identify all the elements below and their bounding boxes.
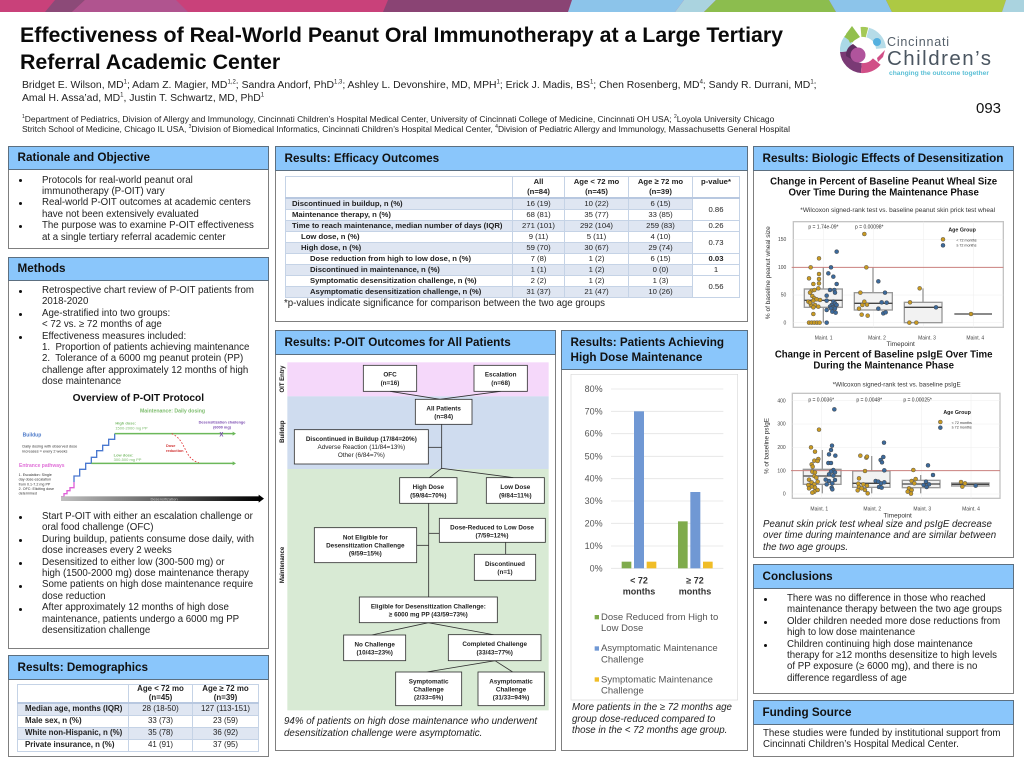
efficacy outcomes table: 7 (8) (531, 254, 546, 263)
demographics table: Male sex, n (%) (25, 716, 82, 725)
efficacy outcomes table: 10 (26) (648, 287, 673, 296)
rationale bullets: have not been extensively evaluated (42, 209, 199, 220)
bar chart: high dose maintenance: 70% (585, 406, 603, 416)
panel: demographics (8, 655, 269, 757)
demographics table: (n=45) (149, 693, 172, 702)
panel: high dose maintenance (561, 330, 748, 751)
chart: wheal size box plot: Over Time During the Maintenance Phase (789, 188, 979, 199)
rationale bullets: immunotherapy (P-OIT) vary (42, 186, 165, 197)
chart: wheal size box plot: % of baseline peanut wheal size (765, 226, 772, 319)
protocol bullets: During buildup, patients consume dose daily, with (42, 534, 254, 545)
chart: wheal size box plot: *Wilcoxon signed-rank test vs. baseline peanut skin prick test wheal (800, 207, 996, 214)
methods bullets (42, 285, 254, 387)
high dose caption (572, 702, 732, 736)
efficacy outcomes table: 259 (83) (646, 221, 675, 230)
chart: psIgE box plot: 0 (783, 492, 786, 498)
chart: overview of P-OIT protocol: Maintenance: Daily dosing (140, 408, 205, 414)
chart: overview of P-OIT protocol: Desensitization (150, 496, 178, 501)
heading: conclusions: Conclusions (762, 570, 833, 582)
efficacy outcomes table: 1 (2) (589, 276, 604, 285)
logo: Cincinnati Children's: changing the outcome together (889, 70, 989, 77)
flowchart: patient outcomes: Challenge (414, 686, 444, 693)
demographics table: 28 (18-50) (142, 704, 179, 713)
chart: psIgE box plot: 100 (777, 468, 786, 474)
chart: wheal size box plot: Change in Percent of Baseline psIgE Over Time (775, 349, 993, 360)
demographics table: Private insurance, n (%) (25, 740, 114, 749)
methods bullets: 1. Proportion of patients achieving maintenance (42, 342, 249, 353)
chart: wheal size box plot: During the Maintenance Phase (813, 361, 955, 372)
chart: wheal size box plot: 0 (784, 320, 787, 326)
demographics table: 36 (92) (213, 728, 238, 737)
heading: rationale and objective (8, 146, 268, 170)
efficacy outcomes table: Discontinued in buildup, n (%) (292, 199, 403, 208)
flowchart: patient outcomes: (31/33=94%) (493, 695, 529, 702)
efficacy outcomes table (285, 176, 740, 298)
chart: wheal size box plot: < 72 months (956, 239, 977, 243)
heading: methods: Methods (18, 262, 66, 274)
chart: wheal size box plot: Change in Percent of Baseline Peanut Wheal Size (770, 176, 998, 187)
flowchart: patient outcomes: OIT Entry (280, 365, 286, 393)
chart: wheal size box plot: ≥ 72 months (956, 243, 977, 247)
outcomes caption: 94% of patients on high dose maintenance who underwent (284, 716, 537, 727)
chart: psIgE box plot: 200 (777, 445, 786, 451)
efficacy outcomes table: 2 (2) (531, 276, 546, 285)
chart: wheal size box plot: Timepoint (887, 341, 915, 348)
efficacy outcomes table: 0 (0) (653, 265, 668, 274)
biologic caption (763, 519, 996, 553)
bar chart: high dose maintenance: 60% (585, 429, 603, 439)
bar chart: high dose maintenance: 0% (590, 563, 603, 573)
chart: overview of P-OIT protocol: day dose escalation (19, 478, 51, 482)
chart: overview of P-OIT protocol: Overview of P-OIT Protocol (73, 393, 204, 404)
efficacy outcomes table: 292 (104) (580, 221, 613, 230)
rationale bullets (42, 174, 254, 243)
chart: psIgE box plot: Age Group (943, 410, 972, 416)
demographics table: 127 (113-151) (201, 704, 250, 713)
flowchart: patient outcomes: Dose-Reduced to Low Dose (450, 524, 534, 531)
chart: overview of P-OIT protocol: Dose (166, 444, 175, 448)
chart: overview of P-OIT protocol: High dose: (115, 420, 136, 425)
flowchart: patient outcomes: Adverse Reaction (11/84=13%) (318, 444, 405, 451)
protocol bullets: desensitization challenge (42, 625, 150, 636)
bar chart: high dose maintenance: Dose Reduced from High to (601, 612, 718, 623)
efficacy outcomes table: 10 (22) (584, 199, 609, 208)
flowchart: patient outcomes: (9/84=11%) (499, 492, 532, 499)
flowchart: patient outcomes: Symptomatic (409, 678, 449, 685)
chart: overview of P-OIT protocol: 1. Escalation: Single (19, 473, 52, 477)
chart: wheal size box plot: 100 (778, 265, 787, 271)
biologic caption: Peanut skin prick test wheal size and psIgE decrease (763, 519, 992, 530)
panel: P-OIT outcomes (275, 330, 556, 751)
methods bullets: Age-stratified into two groups: (42, 308, 170, 319)
efficacy outcomes table: 6 (15) (650, 199, 671, 208)
efficacy outcomes table: 1 (2) (589, 254, 604, 263)
efficacy outcomes table: 68 (81) (526, 210, 551, 219)
panel: biologic effects (753, 146, 1014, 558)
efficacy outcomes table: 30 (67) (584, 243, 609, 252)
chart: overview of P-OIT protocol: 1500-2000 mg PP (115, 425, 148, 430)
chart: psIgE box plot: Maint. 2 (863, 506, 881, 512)
heading: biologic effects: Results: Biologic Effects of Desensitization (762, 152, 1003, 164)
bar chart: high dose maintenance: months (679, 586, 711, 596)
chart: wheal size box plot: Maint. 1 (815, 336, 833, 342)
flowchart: patient outcomes: Other (6/84=7%) (338, 452, 385, 459)
methods bullets: dose maintenance (42, 376, 121, 387)
heading: P-OIT outcomes: Results: P-OIT Outcomes for All Patients (284, 336, 511, 348)
bar chart: high dose maintenance: Challenge (601, 685, 644, 696)
efficacy outcomes table: 59 (70) (526, 243, 551, 252)
bar chart: high dose maintenance: months (623, 586, 655, 596)
heading: conclusions (752, 564, 1014, 588)
bar chart: high dose maintenance: Challenge (601, 654, 644, 665)
heading: biologic effects (752, 146, 1014, 170)
conclusions bullets: high to low dose maintenance (787, 627, 915, 638)
rationale bullets: Real-world P-OIT outcomes at academic centers (42, 197, 251, 208)
bar chart: high dose maintenance: ≥ 72 (686, 575, 704, 585)
demographics table: 33 (73) (148, 716, 173, 725)
methods bullets: 2018-2020 (42, 296, 88, 307)
conclusions bullets: maintenance therapy between the two age groups (787, 604, 1002, 615)
funding text (763, 728, 1000, 750)
chart: psIgE box plot: *Wilcoxon signed-rank test vs. baseline psIgE (833, 382, 961, 389)
efficacy outcomes table: 6 (15) (650, 254, 671, 263)
efficacy outcomes table: 21 (47) (584, 287, 609, 296)
demographics table: Median age, months (IQR) (25, 704, 122, 713)
efficacy outcomes table: Maintenance therapy, n (%) (292, 210, 391, 219)
chart: psIgE box plot: Maint. 4 (962, 506, 980, 512)
flowchart: patient outcomes: (n=68) (491, 380, 510, 387)
bar chart: high dose maintenance: Asymptomatic Maintenance (601, 643, 718, 654)
flowchart: patient outcomes: (2/33=6%) (414, 695, 443, 702)
efficacy outcomes table: Symptomatic desensitization challenge, n (%) (310, 276, 477, 285)
efficacy outcomes table: 29 (74) (648, 243, 673, 252)
demographics table (17, 684, 259, 752)
chart: overview of P-OIT protocol: X (219, 432, 223, 438)
high dose caption: More patients in the ≥ 72 months age (572, 702, 732, 713)
chart: psIgE box plot: Timepoint (884, 512, 912, 519)
chart: overview of P-OIT protocol: Daily dosing with observed dose (22, 444, 77, 448)
efficacy outcomes table: Time to reach maintenance, median number of days (IQR) (292, 221, 502, 230)
bar chart: high dose maintenance: 50% (585, 451, 603, 461)
protocol bullets: Desensitized to either low (300-500 mg) or (42, 557, 225, 568)
flowchart: patient outcomes: (10/43=23%) (356, 649, 393, 656)
chart: psIgE box plot: % of baseline psIgE (764, 418, 771, 474)
heading: efficacy outcomes (274, 146, 748, 170)
efficacy outcomes table: 0.86 (709, 204, 723, 214)
flowchart: patient outcomes: Discontinued in Buildup (17/84=20%) (306, 436, 417, 443)
affiliations: Stritch School of Medicine, Chicago IL USA, 3Division of Biomedical Informatics, Cincinnati Children’s Hospital Medical Center, 4Division of Pediatric Allergy and Immunology, Massachusetts General Hospital (22, 124, 790, 134)
conclusions bullets (787, 593, 1002, 684)
flowchart: patient outcomes: Escalation (485, 372, 517, 379)
heading: rationale and objective: Rationale and Objective (18, 150, 150, 164)
heading: funding source (752, 700, 1014, 724)
title: Effectiveness of Real-World Peanut Oral Immunotherapy at a Large Tertiary (20, 23, 783, 47)
efficacy outcomes table: Low dose, n (%) (301, 232, 360, 241)
protocol bullets: maintenance, patients undergo a 6000 mg PP (42, 614, 239, 625)
demographics table: 35 (78) (148, 728, 173, 737)
methods bullets: Retrospective chart review of P-OIT patients from (42, 285, 254, 296)
conclusions bullets: therapy for ≥12 months desensitize to high levels (787, 650, 997, 661)
efficacy outcomes table: 1 (714, 265, 718, 274)
chart: psIgE box plot: p = 0.00025* (903, 397, 932, 403)
heading: demographics: Results: Demographics (18, 660, 148, 674)
heading: efficacy outcomes: Results: Efficacy Outcomes (284, 152, 439, 164)
chart: wheal size box plot: 150 (778, 237, 787, 243)
flowchart: patient outcomes: (n=16) (381, 380, 399, 387)
poster number: 093 (976, 100, 1001, 117)
efficacy outcomes table: Asymptomatic desensitization challenge, n (%) (310, 287, 481, 296)
title: Referral Academic Center (20, 50, 280, 74)
high dose caption: those in the < 72 months age group. (572, 725, 727, 736)
protocol bullets (42, 511, 254, 636)
chart: psIgE box plot: 400 (777, 398, 786, 404)
flowchart: patient outcomes: Challenge (496, 687, 527, 694)
efficacy outcomes table: High dose, n (%) (301, 243, 361, 252)
conclusions bullets: Children continuing high dose maintenance (787, 639, 973, 650)
logo: Cincinnati Children's (840, 26, 991, 77)
efficacy outcomes table: 1 (1) (531, 265, 546, 274)
outcomes caption: desensitization challenge were asymptomatic. (284, 728, 482, 739)
efficacy outcomes table: (n=45) (585, 187, 608, 196)
bar chart: high dose maintenance (570, 374, 738, 700)
heading: P-OIT outcomes (274, 330, 556, 354)
flowchart: patient outcomes: Asymptomatic (489, 679, 533, 686)
affiliations: 1Department of Pediatrics, Division of Allergy and Immunology, Cincinnati Children’s Hospital Medical Center, University of Cincinnati College of Medicine, Cincinnati OH USA; 2Loyola University Chicago (22, 114, 774, 124)
flowchart: patient outcomes: All Patients (426, 406, 461, 413)
chart: overview of P-OIT protocol: 2. OFC: Eliciting dose (19, 487, 54, 491)
flowchart: patient outcomes: No Challenge (354, 641, 395, 648)
flowchart: patient outcomes: (n=84) (434, 414, 453, 421)
flowchart: patient outcomes: ≥ 6000 mg PP (43/59=73%) (389, 612, 468, 619)
chart: overview of P-OIT protocol: 300-500 mg PP (114, 457, 142, 462)
chart: psIgE box plot: p = 0.0036* (808, 397, 834, 403)
conclusions bullets: There was no difference in those who reached (787, 593, 986, 604)
logo: Cincinnati Children's: Cincinnati (887, 35, 949, 49)
conclusions bullets: of PP exposure (≥ 6000 mg), and there is no (787, 661, 977, 672)
chart: overview of P-OIT protocol: determined (19, 492, 37, 496)
demographics table: 23 (59) (213, 716, 238, 725)
panel: funding source (753, 700, 1014, 757)
demographics table: (n=39) (214, 693, 237, 702)
bar chart: high dose maintenance: 20% (585, 518, 603, 528)
chart: overview of P-OIT protocol: Low dose: (114, 452, 133, 457)
flowchart: patient outcomes: (9/59=15%) (349, 551, 382, 558)
chart: overview of P-OIT protocol: from 0.1-7.2 mg PP (19, 482, 51, 486)
flowchart: patient outcomes: Maintenance (280, 546, 286, 583)
logo: Cincinnati Children's: Children’s (887, 47, 991, 70)
efficacy outcomes table: 0.03 (709, 254, 723, 263)
bar chart: high dose maintenance: 30% (585, 496, 603, 506)
demographics table: 41 (91) (148, 740, 173, 749)
flowchart: patient outcomes: Not Eligible for (343, 534, 388, 541)
heading: funding source: Funding Source (762, 706, 851, 718)
flowchart: patient outcomes: Completed Challenge (462, 641, 527, 648)
bar chart: high dose maintenance: Low Dose (601, 623, 643, 634)
heading: high dose maintenance: High Dose Maintenance (570, 351, 702, 364)
chart: psIgE box plot: Maint. 3 (913, 506, 931, 512)
bar chart: high dose maintenance: Symptomatic Maintenance (601, 674, 713, 685)
conclusions bullets: difference regardless of age (787, 673, 907, 684)
efficacy outcomes table: All (534, 177, 543, 186)
panel: conclusions (753, 564, 1014, 694)
bar chart: high dose maintenance: < 72 (630, 575, 648, 585)
chart: overview of P-OIT protocol: reduction (166, 449, 184, 453)
flowchart: patient outcomes: Desensitization Challenge (326, 542, 405, 549)
efficacy outcomes table: Age < 72 mo (574, 177, 619, 186)
flowchart: patient outcomes: OFC (383, 372, 397, 379)
chart: psIgE box plot (764, 382, 1001, 519)
chart: wheal size box plot: Maint. 2 (868, 336, 886, 342)
bar chart: high dose maintenance: 80% (585, 384, 603, 394)
panel: methods (8, 257, 269, 649)
chart: psIgE box plot: 300 (777, 422, 786, 428)
chart: overview of P-OIT protocol: increases ≈ every 2 weeks (22, 449, 67, 453)
funding text: These studies were funded by institutional support from (763, 728, 1000, 738)
flowchart: patient outcomes: Low Dose (500, 484, 531, 491)
rationale bullets: The purpose was to examine P-OIT effectiveness (42, 220, 254, 231)
flowchart: patient outcomes: High Dose (413, 484, 444, 491)
chart: psIgE box plot: < 72 months (952, 421, 972, 425)
chart: wheal size box plot: 50 (781, 293, 787, 299)
heading: high dose maintenance: Results: Patients Achieving (570, 336, 724, 348)
affiliations (22, 114, 790, 134)
heading: high dose maintenance (560, 330, 748, 370)
efficacy outcomes table: 1 (2) (589, 265, 604, 274)
protocol bullets: high (1500-2000 mg) dose maintenance therapy (42, 568, 249, 579)
high dose caption: group dose-reduced compared to (572, 714, 715, 725)
flowchart: patient outcomes: (33/43=77%) (476, 649, 513, 656)
title (20, 23, 783, 74)
chart: wheal size box plot (765, 176, 1004, 372)
efficacy outcomes table: Age ≥ 72 mo (638, 177, 683, 186)
chart: overview of P-OIT protocol: Desensitization challenge (199, 421, 245, 425)
chart: overview of P-OIT protocol: Buildup (23, 433, 41, 439)
chart: wheal size box plot: p = 0.00098* (855, 225, 884, 231)
efficacy outcomes table: 4 (10) (650, 232, 671, 241)
protocol bullets: Start P-OIT with either an escalation challenge or (42, 511, 253, 522)
flowchart: patient outcomes: (7/59=12%) (476, 532, 508, 539)
rationale bullets: at a single tertiary referral academic center (42, 232, 226, 243)
protocol bullets: dose reduction (42, 591, 106, 602)
outcomes caption (284, 716, 538, 739)
flowchart: patient outcomes: (59/84=70%) (410, 492, 447, 499)
flowchart: patient outcomes: Discontinued (485, 561, 525, 568)
heading: demographics (8, 654, 268, 680)
chart: psIgE box plot: ≥ 72 months (952, 426, 972, 430)
efficacy outcomes table: 33 (85) (648, 210, 673, 219)
efficacy outcomes table: 0.73 (709, 238, 723, 246)
demographics table: White non-Hispanic, n (%) (25, 728, 122, 737)
bar chart: high dose maintenance: 40% (585, 474, 603, 484)
methods bullets: Effectiveness measures included: (42, 331, 186, 342)
efficacy outcomes table: 5 (11) (587, 232, 606, 241)
heading: methods (8, 256, 268, 280)
top colour band (0, 0, 1024, 12)
chart: wheal size box plot: Maint. 3 (918, 336, 936, 342)
methods bullets: 2. Tolerance of a 6000 mg peanut protein (PP) (42, 353, 243, 364)
protocol bullets: After approximately 12 months of high dose (42, 602, 229, 613)
efficacy outcomes table: 0.56 (709, 282, 723, 290)
authors (22, 79, 817, 104)
table footnote: *p-values indicate significance for comparison between the two age groups (284, 298, 605, 309)
efficacy outcomes table: 35 (77) (584, 210, 609, 219)
efficacy outcomes table: Dose reduction from high to low dose, n (%) (310, 254, 471, 263)
panel: rationale and objective (8, 146, 269, 249)
panel: efficacy outcomes (275, 146, 748, 322)
chart: psIgE box plot: Maint. 1 (810, 506, 828, 512)
protocol bullets: Some patients on high dose maintenance require (42, 579, 253, 590)
rationale bullets: Protocols for real-world peanut oral (42, 174, 193, 186)
methods bullets: challenge after approximately 12 months of high (42, 365, 248, 376)
efficacy outcomes table: 9 (11) (529, 232, 548, 241)
efficacy outcomes table: 0.26 (709, 221, 723, 230)
funding text: Cincinnati Children’s Hospital Medical Center. (763, 739, 959, 750)
efficacy outcomes table: (n=39) (649, 187, 672, 196)
bar chart: high dose maintenance: 10% (585, 541, 603, 551)
chart: overview of P-OIT protocol (18, 393, 264, 503)
protocol bullets: dose increases every 2 weeks (42, 545, 172, 556)
methods bullets: < 72 vs. ≥ 72 months of age (42, 319, 162, 330)
efficacy outcomes table: p-value* (701, 177, 731, 186)
chart: wheal size box plot: p = 1.74e-09* (808, 225, 839, 231)
chart: psIgE box plot: p = 0.0048* (856, 397, 882, 403)
flowchart: patient outcomes (280, 362, 549, 710)
efficacy outcomes table: 1 (3) (653, 276, 668, 285)
authors: Bridget E. Wilson, MD1; Adam Z. Magier, MD1,2; Sandra Andorf, PhD1,3; Ashley L. Devonshire, MD, MPH1; Erick J. Madis, BS1; Chen Rosenberg, MD4; Sandy R. Durrani, MD1; (22, 80, 817, 91)
efficacy outcomes table: 31 (37) (526, 287, 551, 296)
demographics table: 37 (95) (213, 740, 238, 749)
efficacy outcomes table: (n=84) (527, 187, 550, 196)
biologic caption: the two age groups. (763, 542, 848, 553)
chart: overview of P-OIT protocol: (6000 mg) (213, 425, 232, 429)
biologic caption: over time during maintenance and are similar between (763, 530, 996, 541)
chart: overview of P-OIT protocol: Entrance pathways (19, 463, 65, 469)
efficacy outcomes table: 271 (101) (522, 221, 555, 230)
conclusions bullets: Older children needed more dose reductions from (787, 616, 1000, 627)
chart: wheal size box plot: Maint. 4 (966, 336, 984, 342)
protocol bullets: oral food challenge (OFC) (42, 522, 153, 533)
flowchart: patient outcomes: (n=1) (497, 569, 513, 576)
chart: wheal size box plot: Age Group (948, 227, 977, 233)
efficacy outcomes table: Discontinued in maintenance, n (%) (310, 265, 440, 274)
flowchart: patient outcomes: Buildup (280, 420, 286, 443)
efficacy outcomes table: 16 (19) (526, 199, 551, 208)
authors: Amal H. Assa’ad, MD1, Justin T. Schwartz, MD, PhD1 (22, 92, 264, 104)
flowchart: patient outcomes: Eligible for Desensitization Challenge: (371, 604, 486, 611)
